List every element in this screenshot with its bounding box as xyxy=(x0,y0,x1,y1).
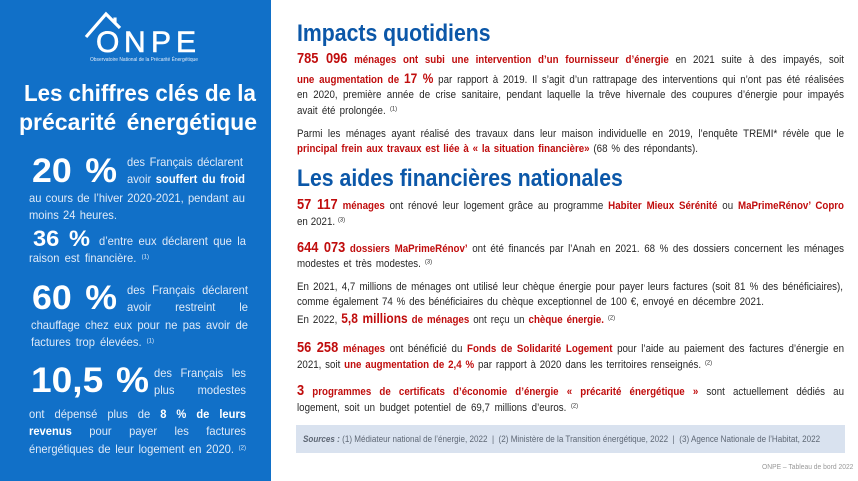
text: energy savings certificates: logement, soit un budget potentiel de 69,7 millions d’euros. (2) xyxy=(297,402,578,414)
text: energy cheque: En 2022, 5,8 millions de ménages ont reçu un chèque énergie. (2) xyxy=(297,311,615,326)
text: energy cheque xyxy=(297,281,843,326)
stat: 20 % cold: des Français déclarent xyxy=(127,155,243,169)
stat: 20 % cold: 20 % xyxy=(32,152,117,190)
logo: ONPE: Observatoire National de la Précarité Énergétique xyxy=(90,56,198,63)
stat: 36 % financial reason: 36 % xyxy=(33,226,90,251)
text: energy cheque: comme également 74 % des bénéficiaires du chèque exceptionnel de 100 €, envoyé en décembre 2021. xyxy=(297,296,764,308)
stat: 10,5 % energy spending: des Français les xyxy=(154,366,246,380)
text: TREMI survey xyxy=(297,128,844,155)
footer note: ONPE – Tableau de bord 2022 xyxy=(762,462,853,471)
text: energy savings certificates xyxy=(297,383,844,414)
stat: 60 % restricted heating xyxy=(31,279,248,349)
text: 644 073 files xyxy=(297,240,844,270)
text: interventions: en 2020, première année de crise sanitaire, pendant laquelle la trêve hivernale des coupures d’énergie pour impayés xyxy=(297,89,844,101)
logo: ONPE: ONPE xyxy=(96,26,196,59)
text: 57 117 households: en 2021. (3) xyxy=(297,216,345,228)
stat: 60 % restricted heating: des Français déclarent xyxy=(127,283,248,297)
stat: 10,5 % energy spending: 10,5 % xyxy=(31,361,149,400)
heading: Impacts quotidiens: Impacts quotidiens xyxy=(297,20,491,47)
text: 644 073 files: modestes et très modestes. (3) xyxy=(297,258,432,270)
text: interventions xyxy=(297,51,844,117)
text: 57 117 households xyxy=(297,197,844,228)
text: energy savings certificates: 3 programmes de certificats d’économie d’énergie « précarité énergétique » sont actuellement dédiés au xyxy=(297,383,844,399)
stat: 20 % cold: moins 24 heures. xyxy=(29,208,117,222)
heading: Les aides financières nationales: Les aides financières nationales xyxy=(297,165,623,192)
stat: 36 % financial reason: d’entre eux déclarent que la xyxy=(99,234,246,248)
text: energy cheque: En 2021, 4,7 millions de ménages ont utilisé leur chèque énergie pour payer leurs factures (soit 81 % des bénéficiaires), xyxy=(297,281,843,293)
panel: key figures sidebar xyxy=(0,0,271,481)
logo: ONPE xyxy=(84,12,198,63)
stat: 36 % financial reason xyxy=(29,226,246,265)
stat: 60 % restricted heating: chauffage chez eux pour ne pas avoir de xyxy=(31,318,248,332)
text: TREMI survey: Parmi les ménages ayant réalisé des travaux dans leur maison individuelle en 2019, l’enquête TREMI* révèle que le xyxy=(297,128,844,140)
stat: 20 % cold xyxy=(29,152,245,222)
text: solidarity fund xyxy=(297,340,844,371)
text: solidarity fund: 56 258 ménages ont bénéficié du Fonds de Solidarité Logement pour l’aide au paiement des factures d’énergie en xyxy=(297,340,844,356)
text: solidarity fund: 2021, soit une augmentation de 2,4 % par rapport à 2020 dans les territoires renseignés. (2) xyxy=(297,359,712,371)
stat: 10,5 % energy spending: ont dépensé plus de 8 % de leurs xyxy=(29,407,246,421)
text: TREMI survey: principal frein aux travaux est liée à « la situation financière» (68 % des répondants). xyxy=(297,143,698,155)
sources box: Sources : (1) Médiateur national de l’énergie, 2022 | (2) Ministère de la Transition énergétique, 2022 | (3) Agence Nationale de l’Habitat, 2022 xyxy=(303,434,820,444)
text: interventions: avait été prolongée. (1) xyxy=(297,105,397,117)
text: 57 117 households: 57 117 ménages ont rénové leur logement grâce au programme Habiter Mieux Sérénité ou MaPrimeRénov’ Copro xyxy=(297,197,844,213)
title: Les chiffres clés de la xyxy=(24,80,256,106)
text: interventions: 785 096 ménages ont subi une intervention d’un fournisseur d’énergie en 2021 suite à des impayés, soit xyxy=(297,51,844,67)
title xyxy=(19,80,257,135)
stat: 10,5 % energy spending: revenus pour payer les factures xyxy=(29,424,246,438)
text: interventions: une augmentation de 17 % par rapport à 2019. Il s’agit d’un rattrapage des interventions qui n’ont pas été réalisées xyxy=(297,71,844,86)
stat: 10,5 % energy spending: énergétiques de leur logement en 2020. (2) xyxy=(29,442,246,456)
stat: 60 % restricted heating: factures trop élevées. (1) xyxy=(31,335,154,349)
title: précarité énergétique xyxy=(19,109,257,135)
stat: 20 % cold: au cours de l’hiver 2020-2021, pendant au xyxy=(29,191,245,205)
stat: 60 % restricted heating: avoir restreint le xyxy=(127,300,248,314)
stat: 10,5 % energy spending xyxy=(29,361,246,456)
stat: 36 % financial reason: raison est financière. (1) xyxy=(29,251,149,265)
stat: 20 % cold: avoir souffert du froid xyxy=(127,172,245,186)
sources box xyxy=(296,425,845,453)
stat: 60 % restricted heating: 60 % xyxy=(32,279,117,317)
text: 644 073 files: 644 073 dossiers MaPrimeRénov’ ont été financés par l’Anah en 2021. 68 % des dossiers concernent les ménages xyxy=(297,240,844,256)
stat: 10,5 % energy spending: plus modestes xyxy=(154,383,246,397)
